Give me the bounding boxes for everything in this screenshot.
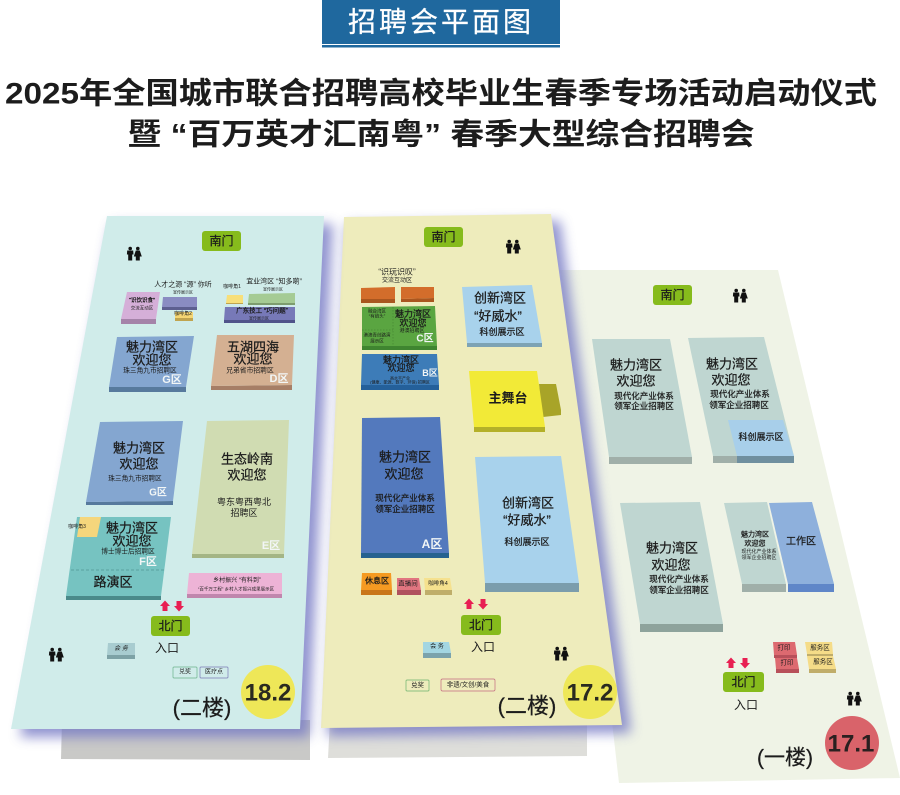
arrows bbox=[726, 658, 750, 668]
rest area: 休息区 bbox=[365, 576, 389, 586]
zone E: 生态岭南 bbox=[221, 452, 273, 466]
zone G lower: G区 bbox=[149, 486, 167, 498]
zone D: 兄弟省市招聘区 bbox=[226, 366, 274, 374]
zone: innovation lower: 创新湾区 bbox=[502, 496, 554, 510]
entrance north gate 17.2: 北门 bbox=[469, 617, 493, 632]
zone: talent area 1: 现代化产业体系 bbox=[614, 391, 674, 401]
zone A: 领军企业招聘区 bbox=[375, 504, 435, 514]
medical point: 医疗点 bbox=[205, 668, 223, 676]
entrance label: 入口 bbox=[734, 698, 758, 712]
exchange area: 交流互动区 bbox=[382, 276, 412, 284]
zone A: A区 bbox=[422, 537, 442, 551]
zone: talent area 2 with science showcase: 魅力湾区 bbox=[706, 356, 758, 372]
zone: talent area 1: 领军企业招聘区 bbox=[614, 401, 674, 411]
zone C: C区 bbox=[416, 332, 434, 344]
zone: talent area 2 with science showcase: 欢迎您 bbox=[711, 372, 751, 388]
zone A: 魅力湾区 bbox=[379, 450, 431, 464]
zone C bbox=[362, 306, 437, 350]
bay area showcase: 宣传展示区 bbox=[263, 286, 283, 292]
talent showcase: 宣传展示区 bbox=[173, 288, 193, 294]
zone C: 欢迎您 bbox=[399, 317, 427, 328]
entrance north gate 17.1: 北门 bbox=[731, 674, 756, 689]
floor label: (二楼) bbox=[498, 694, 556, 718]
entrance south gate 17.1 bbox=[653, 285, 692, 305]
prize redemption: 兑奖 bbox=[411, 680, 424, 689]
zone F and roadshow: 博士博士后招聘区 bbox=[101, 546, 155, 556]
live room: 直播间 bbox=[398, 578, 418, 588]
zone: innovation lower bbox=[475, 456, 579, 592]
zone B: 欢迎您 bbox=[387, 362, 415, 373]
zone F and roadshow: 路演区 bbox=[93, 574, 133, 590]
icon: restroom bbox=[733, 289, 748, 302]
title bbox=[5, 78, 877, 152]
zone: talent area 1: 欢迎您 bbox=[616, 374, 656, 388]
live room bbox=[397, 578, 421, 595]
zone C: 魅力湾区 bbox=[395, 308, 431, 319]
zone D: 五湖四海 bbox=[227, 340, 279, 354]
zone G upper bbox=[109, 336, 194, 392]
zone: talent area 3: 现代化产业体系 bbox=[649, 574, 709, 584]
prize redemption: 兑奖 bbox=[179, 668, 191, 676]
zone D: D区 bbox=[270, 372, 288, 385]
zone E bbox=[192, 420, 289, 558]
zone: innovation lower: 科创展示区 bbox=[504, 536, 550, 547]
service area bbox=[805, 642, 836, 673]
culture and food: 非遗/文创/美食 bbox=[447, 680, 490, 688]
coffee corner 4 bbox=[424, 578, 452, 595]
print area: 打印 bbox=[780, 658, 794, 666]
zone G upper: 欢迎您 bbox=[132, 352, 172, 368]
zone C: 港澳招聘区 bbox=[399, 327, 425, 334]
entrance south gate 18.2: 南门 bbox=[209, 233, 234, 248]
coffee corner 4: 咖啡角4 bbox=[428, 579, 448, 587]
badge 17.1 bbox=[825, 716, 879, 770]
entrance label: 入口 bbox=[471, 640, 495, 654]
rural revitalization showcase: “百千万工程” 乡村人才振兴成果展示区 bbox=[198, 586, 275, 592]
zone G lower bbox=[86, 421, 183, 505]
service area: 服务区 bbox=[810, 642, 830, 652]
entrance north gate 17.1 bbox=[723, 672, 764, 692]
conference affairs: 会 务 bbox=[430, 642, 444, 650]
rest area bbox=[361, 573, 392, 595]
zone G upper: G区 bbox=[162, 373, 182, 386]
culture and food bbox=[441, 679, 495, 691]
food exchange area: “识饮识食” bbox=[129, 296, 155, 304]
zone C: 港澳青创路演 bbox=[364, 332, 391, 338]
zone B bbox=[361, 354, 439, 390]
zone E: 粤东粤西粤北 bbox=[217, 496, 271, 507]
zone: talent area 3: 欢迎您 bbox=[651, 558, 691, 572]
badge 17.2: 17.2 bbox=[567, 680, 613, 706]
zone: talent area 4: 领军企业招聘区 bbox=[741, 554, 777, 561]
zone G lower: 欢迎您 bbox=[119, 456, 159, 472]
zone: talent area 4: 现代化产业体系 bbox=[741, 548, 777, 555]
badge 17.1: 17.1 bbox=[828, 730, 874, 758]
zone: talent area 3: 领军企业招聘区 bbox=[649, 585, 709, 595]
zone G upper: 珠三角九市招聘区 bbox=[123, 366, 177, 374]
floor label: (二楼) bbox=[173, 696, 231, 720]
medical point bbox=[200, 667, 228, 678]
food exchange area: 交流互动区 bbox=[131, 304, 154, 312]
exchange area bbox=[361, 268, 434, 303]
entrance south gate 17.2 bbox=[424, 227, 463, 247]
zone F and roadshow bbox=[66, 517, 171, 600]
Guangdong skills showcase: 宣传展示区 bbox=[249, 314, 269, 320]
zone B: B区 bbox=[422, 368, 438, 378]
panel: hall 17.1 first floor bbox=[560, 270, 900, 783]
badge 18.2: 18.2 bbox=[245, 680, 291, 706]
zone: innovation upper: 创新湾区 bbox=[474, 290, 526, 306]
zone G lower: 珠三角九市招聘区 bbox=[108, 474, 162, 482]
arrows bbox=[160, 600, 184, 612]
zone E: 招聘区 bbox=[230, 507, 258, 518]
zone: talent area 1: 魅力湾区 bbox=[610, 358, 662, 372]
zone A: 现代化产业体系 bbox=[375, 493, 435, 503]
icon: restroom bbox=[554, 647, 569, 660]
zone: innovation lower: “好威水” bbox=[503, 512, 551, 528]
zone: talent area 2 with science showcase bbox=[688, 337, 794, 463]
entrance label: 入口 bbox=[155, 641, 179, 655]
zone: talent area 3: 魅力湾区 bbox=[646, 540, 698, 556]
conference affairs: 会 务 bbox=[114, 644, 129, 652]
zone E: E区 bbox=[262, 539, 280, 552]
zone C: 融合湾区 bbox=[368, 308, 386, 314]
entrance north gate 18.2 bbox=[151, 616, 190, 636]
zone F and roadshow: 咖啡角3 bbox=[68, 523, 86, 530]
badge 17.2 bbox=[563, 665, 617, 719]
small stage annex bbox=[539, 384, 561, 417]
conference affairs bbox=[107, 643, 135, 659]
header banner bbox=[322, 0, 560, 48]
zone G lower: 魅力湾区 bbox=[113, 440, 165, 456]
zone: innovation upper: 科创展示区 bbox=[479, 326, 525, 337]
title: 2025年全国城市联合招聘高校毕业生春季专场活动启动仪式 bbox=[5, 78, 877, 110]
entrance south gate 17.1: 南门 bbox=[660, 287, 685, 302]
coffee corner 1 bbox=[223, 283, 243, 304]
main stage bbox=[469, 371, 545, 432]
zone: talent area 1 bbox=[592, 339, 692, 464]
zone B: (健康、能源、数字、环保) 招聘区 bbox=[370, 378, 430, 384]
zone: innovation upper bbox=[462, 285, 542, 347]
print area bbox=[773, 642, 799, 673]
arrows bbox=[464, 598, 488, 610]
zone: talent area 2 with science showcase: 现代化产业体系 bbox=[710, 389, 770, 399]
zone F and roadshow: 魅力湾区 bbox=[106, 520, 158, 536]
header banner: 招聘会平面图 bbox=[348, 6, 534, 38]
zone D bbox=[211, 335, 294, 390]
Guangdong skills showcase: 广东技工 “巧问题” bbox=[236, 306, 288, 314]
talent showcase: 人才之源 “源” 你听 bbox=[154, 280, 212, 288]
zone F and roadshow: 欢迎您 bbox=[112, 534, 152, 548]
zone: talent area 3 bbox=[620, 502, 723, 632]
prize redemption bbox=[406, 680, 429, 691]
panel: hall 17.2 second floor bbox=[321, 214, 631, 758]
entrance south gate 18.2 bbox=[202, 231, 241, 251]
bay area showcase: 宜业湾区 “知多啲” bbox=[246, 276, 302, 286]
zone B: 高水平产业 bbox=[390, 374, 410, 380]
entrance south gate 17.2: 南门 bbox=[431, 229, 456, 244]
zone: talent area 4: 欢迎您 bbox=[744, 538, 766, 548]
coffee corner 1: 咖啡角1 bbox=[223, 283, 241, 290]
entrance north gate 17.2 bbox=[461, 615, 501, 635]
entrance north gate 18.2: 北门 bbox=[158, 618, 183, 633]
rural revitalization showcase: 乡村振兴 “有料到” bbox=[213, 576, 261, 584]
service area: 服务区 bbox=[813, 656, 833, 666]
title: 暨 “百万英才汇南粤” 春季大型综合招聘会 bbox=[128, 118, 754, 152]
icon: restroom bbox=[49, 648, 64, 662]
icon: restroom bbox=[506, 240, 521, 254]
zone A bbox=[361, 417, 449, 558]
zone C: “有链头” bbox=[369, 312, 386, 320]
zone: work area bbox=[769, 502, 834, 592]
food exchange area bbox=[121, 292, 160, 324]
zone: innovation upper: “好威水” bbox=[474, 308, 522, 324]
bay area showcase bbox=[246, 276, 302, 305]
prize redemption bbox=[173, 667, 197, 678]
badge 18.2 bbox=[241, 665, 295, 719]
zone B: 魅力湾区 bbox=[383, 354, 419, 365]
zone G upper: 魅力湾区 bbox=[126, 340, 178, 354]
icon: restroom bbox=[847, 692, 862, 706]
icon: restroom bbox=[127, 247, 142, 260]
zone E: 欢迎您 bbox=[227, 468, 267, 482]
coffee corner 2 bbox=[174, 310, 193, 321]
zone C: 展示区 bbox=[370, 338, 384, 344]
zone: work area: 工作区 bbox=[786, 536, 816, 548]
Guangdong skills showcase bbox=[224, 306, 295, 323]
print area: 打印 bbox=[778, 642, 790, 652]
floor label: (一楼) bbox=[757, 746, 813, 770]
zone D: 欢迎您 bbox=[233, 352, 273, 366]
exchange area: “识玩识叹” bbox=[378, 268, 416, 276]
panel: hall 18.2 second floor bbox=[11, 216, 333, 760]
main stage: 主舞台 bbox=[488, 390, 528, 406]
zone: talent area 4 bbox=[724, 502, 786, 592]
talent showcase bbox=[154, 280, 212, 310]
conference affairs bbox=[423, 642, 451, 658]
zone: talent area 2 with science showcase: 领军企业招聘区 bbox=[709, 400, 769, 410]
coffee corner 2: 咖啡角2 bbox=[174, 310, 192, 317]
zone F and roadshow: F区 bbox=[139, 555, 157, 568]
zone A: 欢迎您 bbox=[384, 466, 424, 482]
rural revitalization showcase bbox=[187, 573, 282, 598]
zone: talent area 4: 魅力湾区 bbox=[741, 530, 769, 538]
zone: talent area 2 with science showcase: 科创展示区 bbox=[738, 431, 784, 442]
